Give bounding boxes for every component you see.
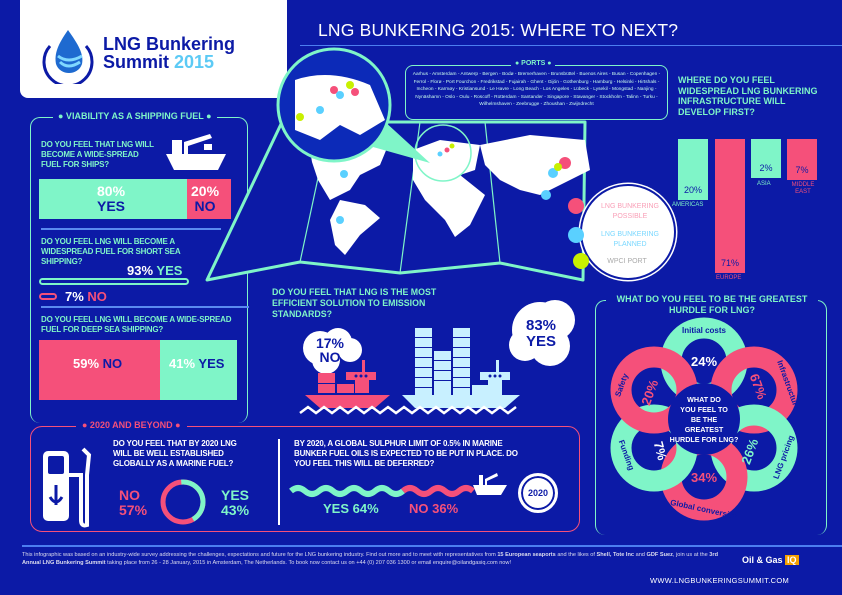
footer: This infographic was based on an industry-wide survey addressing the challenges, expectations and future for the LNG bunkering industry. Find out more and to meet with representatives from 15 European seaports and the likes of Shell, Tote Inc and GDF Suez, join us at the 3rd Annual LNG Bunkering Summit taking place from 26 - 28 January, 2015 in Amsterdam, The Netherlands. To book now contact us on +44 (0) 207 036 1300 or email enquire@oilandgasiq.com now! (22, 552, 718, 566)
question: sulphur: BY 2020, A GLOBAL SULPHUR LIMIT OF 0.5% IN MARINE BUNKER FUEL OILS IS EXPECTED TO BE PUT IN PLACE. DO YOU FEEL THIS WILL BE DEFERRED? (294, 439, 518, 468)
icon: clock 2020 (518, 473, 558, 513)
chart: infrastructure region: 71% (721, 258, 739, 268)
magnifier connector (373, 120, 430, 163)
bar: 80/20 (39, 179, 231, 219)
footer (22, 545, 842, 585)
ring chart: LNG pricing (772, 434, 796, 480)
logo: LNG Bunkering (103, 34, 235, 54)
icon: fuel pump (43, 448, 92, 528)
bubble: 83% yes: 83% (526, 317, 556, 334)
text: EUROPE (716, 275, 741, 281)
ring chart: Initial costs (682, 326, 727, 335)
ships (299, 300, 575, 415)
icon: ship (166, 134, 226, 170)
panel: 2020 and beyond: NO (119, 487, 140, 503)
panel: 2020 and beyond: 43% (221, 502, 249, 518)
chart: infrastructure region: 2% (759, 163, 772, 173)
bubble: 17% no (316, 335, 344, 365)
ring chart: HURDLE FOR LNG? (670, 435, 738, 444)
ring chart: WHAT DO (687, 395, 721, 404)
panel: viability: 7% NO (65, 289, 107, 304)
question 3: DO YOU FEEL LNG WILL BECOME A WIDE-SPREAD FUEL FOR DEEP SEA SHIPPING? (41, 315, 231, 334)
logo (20, 0, 287, 98)
footer: WWW.LNGBUNKERINGSUMMIT.COM (650, 576, 789, 585)
bubble: 17% no: NO (320, 349, 340, 365)
bar: 80/20: NO (195, 198, 216, 214)
panel: hurdles: WHAT DO YOU FEEL TO BE THE GREATEST HURDLE FOR LNG? (617, 294, 807, 315)
bar: 59/41: 59% NO (73, 356, 122, 371)
title: LNG BUNKERING 2015: WHERE TO NEXT? (318, 20, 678, 40)
legend: WPCI PORT (607, 258, 647, 265)
bar: 80/20: 80% (97, 183, 125, 199)
ring chart: Infrastructure (775, 359, 802, 412)
panel: viability: 93% YES (127, 263, 182, 278)
panel: 2020 and beyond: NO 36% (409, 501, 458, 516)
bubble: 83% yes (526, 317, 556, 350)
chart: infrastructure region: 7% (795, 165, 808, 175)
panel: hurdles (595, 300, 827, 535)
emission question: DO YOU FEEL THAT LNG IS THE MOST EFFICIENT SOLUTION TO EMISSION STANDARDS? (272, 287, 436, 319)
question: established: DO YOU FEEL THAT BY 2020 LNG WILL BE WELL ESTABLISHED GLOBALLY AS A MARINE FUEL? (113, 439, 237, 468)
icon: drop (42, 30, 94, 84)
ring chart: Funding (617, 439, 636, 472)
ring chart (610, 318, 802, 521)
question 1: DO YOU FEEL THAT LNG WILL BECOME A WIDE-SPREAD FUEL FOR SHIPS? (41, 140, 154, 169)
ring chart: 24% (691, 354, 717, 369)
ring chart: 67% (747, 372, 770, 402)
chart: infrastructure region: MIDDLE EAST (792, 182, 814, 195)
question 2: DO YOU FEEL LNG WILL BECOME A WIDESPREAD FUEL FOR SHORT SEA SHIPPING? (41, 237, 180, 266)
donut (160, 480, 206, 524)
logo: Summit 2015 (103, 52, 214, 72)
panel: ports (405, 65, 668, 120)
text: ● 2020 AND BEYOND ● (82, 420, 181, 430)
panel: 2020 and beyond: YES 64% (323, 501, 379, 516)
bar: 80/20: 20% (191, 183, 219, 199)
legend (568, 182, 678, 282)
ring chart: 26% (738, 436, 761, 466)
text: ● PORTS ● (515, 60, 551, 67)
panel: 2020 and beyond: 57% (119, 502, 147, 518)
icon: clock 2020: 2020 (528, 488, 548, 498)
panel: 2020 and beyond (30, 426, 580, 532)
ring chart: Global conversion (669, 498, 740, 521)
ring chart: 34% (691, 470, 717, 485)
panel: viability (30, 117, 248, 423)
map (206, 48, 590, 282)
ring chart: 7% (651, 440, 670, 462)
ring chart: 20% (638, 377, 661, 407)
bar: 59/41: 41% YES (169, 356, 224, 371)
chart: infrastructure region: AMERICAS (672, 202, 703, 208)
emission question (272, 287, 575, 415)
ring chart: YOU FEEL TO (680, 405, 728, 414)
chart: infrastructure region (672, 75, 818, 281)
chart: infrastructure region: 20% (684, 185, 702, 195)
bar: 59/41 (39, 340, 237, 400)
panel: ports: Aarhus - Amsterdam - Antwerp - Bergen - Bodø - Bremerhaven - Brunsbüttel - Buenos Aires - Busan - Copenhagen - Ferrol - Florø - Port Fourchon - Fredrikstad - Fujairah - Ghent - Gijón - Gothenburg - Hamburg - Helsinki - Hirtshals - Incheon - Karmøy - Kristiansund - Le Havre - Long Beach - Los Angeles - Lübeck - Lysekil - Mongstad - Nanjing - Nynäshamn - Oslo - Oulu - Roscoff - Rotterdam - Santander - Singapore - Stavanger - Stockholm - Talinn - Turku - Wilhelmshaven - Zeebrugge - Zhoushan - Zwijndrecht (413, 72, 660, 107)
logo: oil & gas iq: Oil & Gas IQ (742, 555, 797, 565)
legend: LNG BUNKERING POSSIBLE (601, 203, 659, 220)
chart: infrastructure region: WHERE DO YOU FEEL WIDESPREAD LNG BUNKERING INFRASTRUCTURE WILL DEVELOP FIRST? (678, 75, 818, 116)
panel: 2020 and beyond: YES (221, 487, 249, 503)
chart: infrastructure region: ASIA (757, 181, 771, 187)
bubble: 17% no: 17% (316, 335, 344, 351)
legend: LNG BUNKERING PLANNED (601, 231, 659, 248)
bubble: 83% yes: YES (526, 333, 556, 350)
ring chart: Safety (613, 372, 630, 398)
heading: ● VIABILITY AS A SHIPPING FUEL ● (58, 111, 212, 121)
icon: small ship (473, 473, 507, 495)
bar: 80/20: YES (97, 198, 125, 214)
ring chart: BE THE (691, 415, 717, 424)
ring chart: GREATEST (685, 425, 724, 434)
